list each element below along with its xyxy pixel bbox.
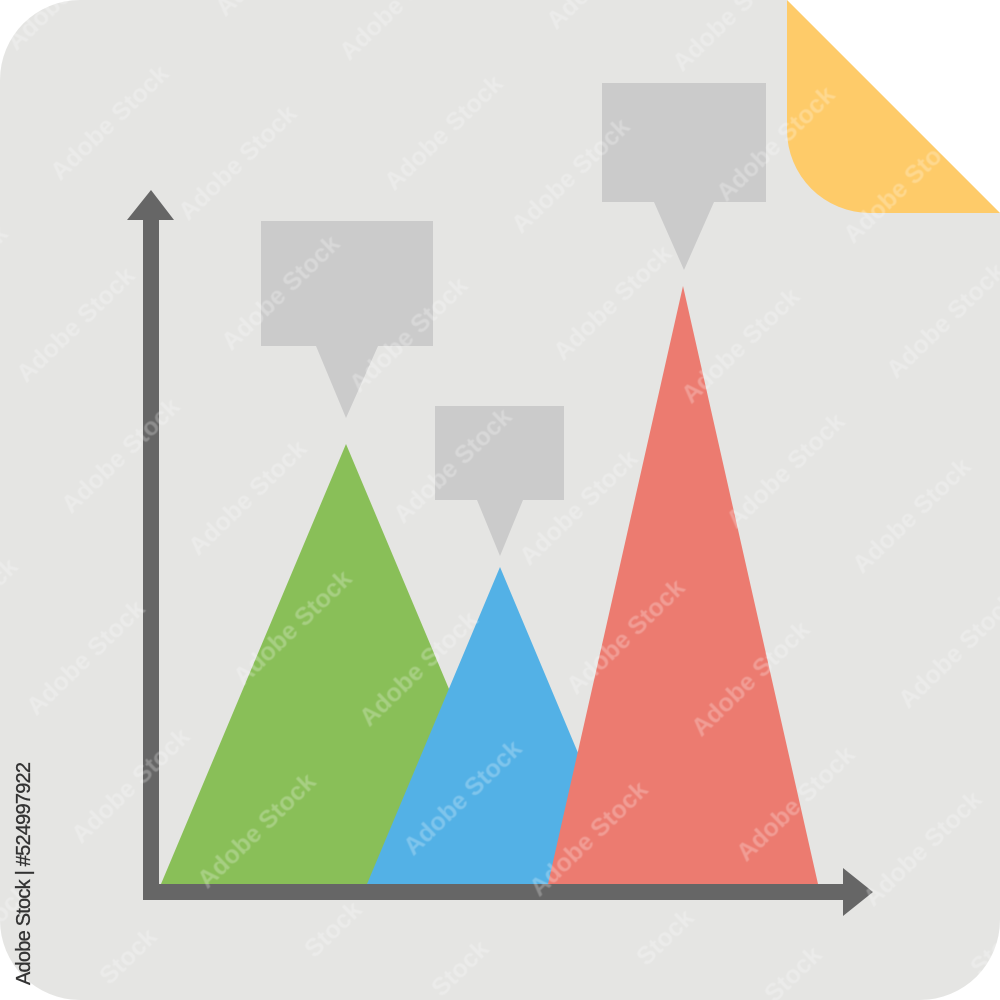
watermark pattern: Stock (94, 923, 162, 990)
watermark pattern: Adobe Stock (711, 81, 840, 207)
icon: folded page corner (787, 0, 1000, 213)
watermark pattern: Adobe Stock (344, 272, 473, 398)
watermark pattern: Adobe Stock (192, 768, 321, 894)
watermark pattern: Adobe Stock (676, 283, 805, 409)
callout: red triangle label (602, 83, 766, 270)
watermark pattern: Adobe Stock (173, 100, 302, 226)
watermark pattern: Stock (299, 896, 367, 963)
arrow: horizontal axis (143, 868, 873, 916)
watermark pattern: Adobe Stock (228, 565, 357, 691)
arrow: vertical axis (127, 190, 174, 900)
green triangle (161, 444, 531, 884)
watermark pattern: Adobe Stock (524, 776, 653, 902)
watermark pattern: Adobe Stock (548, 240, 677, 366)
watermark pattern: Adobe Stock (561, 574, 690, 700)
watermark pattern: Adobe Stock (506, 113, 635, 239)
watermark pattern: Adobe Stock (858, 786, 987, 912)
watermark pattern: Adobe Stock (847, 453, 976, 579)
watermark pattern: Adobe Stock (514, 445, 643, 571)
watermark pattern: Adobe Stock (838, 123, 967, 249)
callout: blue triangle label (435, 406, 564, 556)
watermark pattern: Adobe Stock (21, 595, 150, 721)
watermark pattern: Adobe Stock (388, 403, 517, 529)
watermark pattern: Adobe Stock (721, 408, 850, 534)
watermark pattern: Adobe Stock (354, 606, 483, 732)
watermark pattern: Adobe Stock (56, 393, 185, 519)
watermark pattern: Adobe Stock (686, 616, 815, 742)
blue triangle (367, 567, 633, 884)
watermark pattern: Adobe Stock (731, 741, 860, 867)
red triangle (548, 286, 818, 884)
callout: green triangle label (261, 221, 433, 418)
watermark pattern: Adobe Stock (183, 435, 312, 561)
watermark pattern: Adobe Stock (379, 70, 508, 196)
watermark pattern: Adobe Stock (45, 60, 174, 186)
watermark pattern: Adobe Stock (398, 735, 527, 861)
watermark pattern: Adobe Stock (66, 723, 195, 849)
watermark pattern: Adobe Stock (216, 230, 345, 356)
watermark pattern: Adobe Stock (11, 262, 140, 388)
watermark pattern: Stock (631, 904, 699, 971)
side credit text: Adobe Stock | #524997922 (13, 762, 35, 985)
